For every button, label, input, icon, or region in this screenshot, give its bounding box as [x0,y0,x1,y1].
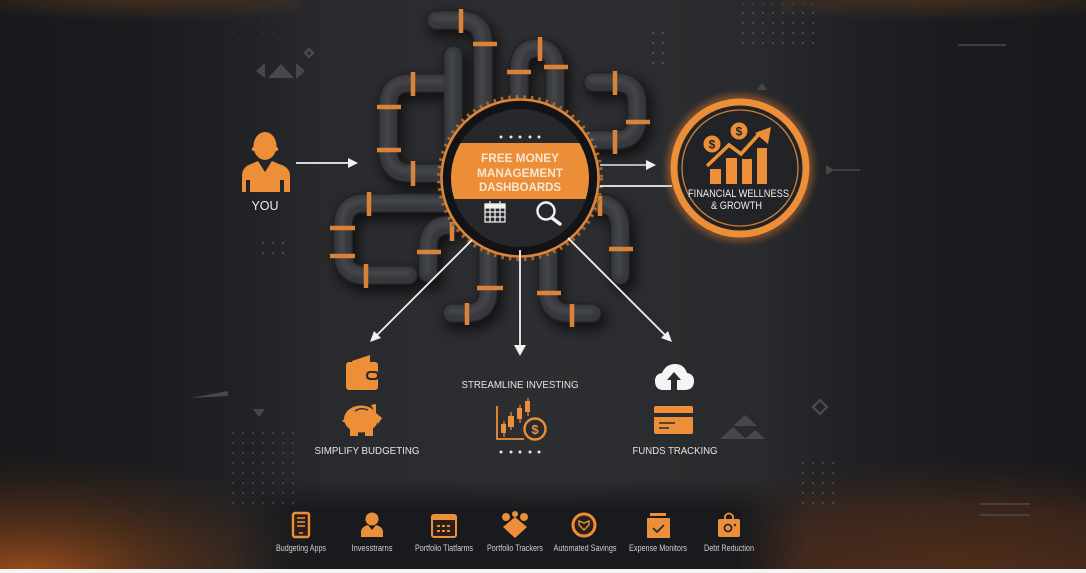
icon: piggy bank [342,404,382,436]
item: budgeting apps [276,513,326,553]
item: investments: Invesstrarns [352,543,393,553]
branch: simplify budgeting [314,355,420,457]
item: investments [352,512,393,553]
icon: calendar [485,201,505,222]
person: you [242,132,290,213]
orange title band [451,143,589,199]
branch: funds tracking [632,364,718,457]
item: portfolio platforms: Portfolio Tlatfarms [415,543,473,553]
icon: wallet [346,355,379,390]
pipe bodies [343,20,637,313]
icon: cloud upload [655,364,694,390]
dots [500,450,540,454]
item: debt reduction [704,514,754,553]
label: SIMPLIFY BUDGETING [314,445,420,457]
item: automated savings [554,514,617,553]
pipe network [330,9,650,327]
icon: credit card [654,406,693,434]
central hub [440,98,600,258]
pipe shadows [347,26,641,319]
financial wellness circle [671,99,809,237]
branch: streamline investing [462,379,578,454]
label: STREAMLINE INVESTING [462,379,578,391]
item: budgeting apps: Budgeting Apps [276,543,326,553]
item: expense monitors: Expense Monitors [629,543,687,553]
wellness label: FINANCIAL WELLNESS [688,188,789,200]
icon: magnifier [538,202,560,224]
item: portfolio trackers [487,511,543,553]
item: portfolio platforms [415,515,473,553]
bottom tool row [276,511,754,553]
wellness label: & GROWTH [711,200,762,212]
icon: person [242,132,290,192]
icon: growth chart [704,122,771,184]
hub title: FREE MONEY [481,151,559,165]
arrows [296,158,672,356]
hub title: MANAGEMENT [477,166,564,180]
wellness label [688,188,789,212]
label: FUNDS TRACKING [632,445,718,457]
item: portfolio trackers: Portfolio Trackers [487,543,543,553]
orange pipe clamps [330,9,650,327]
label: you: YOU [251,199,279,213]
hub title: DASHBOARDS [479,180,561,194]
band dots [500,136,540,138]
item: automated savings: Automated Savings [554,543,617,553]
item: expense monitors [629,513,687,553]
hub title [477,151,564,194]
icon: candlestick chart: $ [531,422,539,437]
financial wellness circle: $ [736,124,743,138]
item: debt reduction: Debt Reduction [704,543,754,553]
bottom white edge [0,569,1086,573]
financial wellness circle: $ [709,138,716,152]
